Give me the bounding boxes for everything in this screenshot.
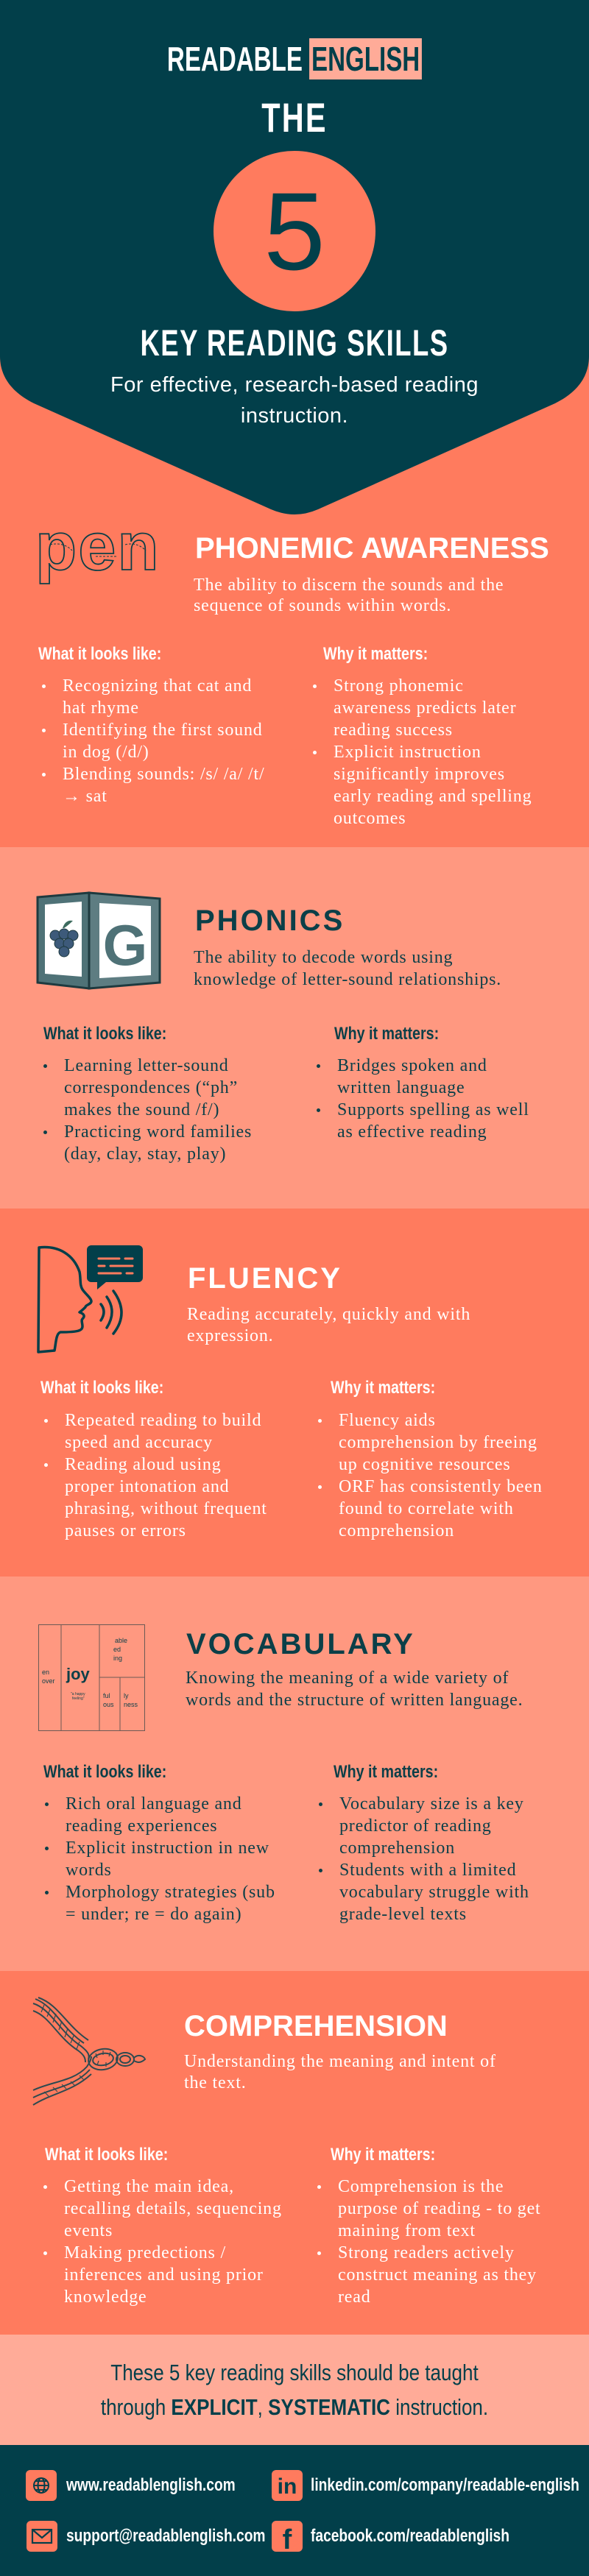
list: why it matters: Fluency aids: [339, 1411, 436, 1430]
subheading: what it looks like: What it looks like:: [43, 1024, 166, 1044]
subtitle: [110, 373, 479, 428]
list: what it looks like: [42, 676, 264, 806]
list: what it looks like: Repeated reading to build: [65, 1411, 261, 1430]
subheading: what it looks like: What it looks like:: [40, 1378, 163, 1398]
subheading: what it looks like: What it looks like:: [43, 1762, 166, 1782]
icon: morphology grid: [38, 1624, 145, 1731]
list: why it matters: significantly improves: [334, 765, 505, 784]
list: what it looks like: = under; re = do again): [66, 1905, 241, 1924]
list: what it looks like: recalling details, sequencing: [64, 2199, 282, 2218]
icon: morphology grid: feeling": [72, 1696, 85, 1701]
icon: morphology grid: joy: [66, 1665, 91, 1683]
panel: fluency: [0, 1209, 589, 1577]
list: what it looks like: Practicing word families: [64, 1122, 252, 1142]
icon: email: [27, 2521, 57, 2552]
heading: COMPREHENSION: [184, 2010, 448, 2042]
list: what it looks like: phrasing, without frequent: [65, 1499, 267, 1518]
list: why it matters: predictor of reading: [339, 1816, 492, 1836]
list: why it matters: vocabulary struggle with: [339, 1883, 529, 1902]
description: the text.: [184, 2073, 247, 2092]
list: why it matters: Strong phonemic: [334, 676, 464, 696]
list: what it looks like: Recognizing that cat and: [63, 676, 252, 696]
list: why it matters: read: [338, 2287, 371, 2307]
list: what it looks like: pauses or errors: [65, 1521, 186, 1540]
list: what it looks like: inferences and using prior: [64, 2265, 264, 2285]
icon: morphology grid: ing: [113, 1655, 122, 1662]
description: The ability to decode words using: [194, 948, 453, 967]
callout: explicit systematic instruction: through EXPLICIT, SYSTEMATIC instruction.: [101, 2394, 488, 2420]
list: why it matters: Vocabulary size is a key: [339, 1794, 524, 1814]
description: words and the structure of written language.: [186, 1691, 523, 1710]
icon: morphology grid: "a happy: [71, 1692, 85, 1696]
footer: contact links: [0, 2445, 589, 2576]
big number circle: [214, 151, 375, 311]
list: what it looks like: Getting the main idea,: [64, 2177, 234, 2196]
list: why it matters: purpose of reading - to get: [338, 2199, 541, 2218]
description: knowledge of letter-sound relationships.: [194, 970, 501, 989]
subheading: why it matters: Why it matters:: [331, 2145, 435, 2165]
icon: braided rope: [32, 1997, 146, 2106]
list: why it matters: Explicit instruction: [334, 743, 482, 762]
list: what it looks like: → sat: [63, 787, 107, 806]
description: sequence of sounds within words.: [194, 596, 451, 615]
list: what it looks like: events: [64, 2221, 113, 2240]
list: why it matters: written language: [337, 1078, 465, 1097]
list: why it matters: awareness predicts later: [334, 698, 516, 718]
description: Understanding the meaning and intent of: [184, 2052, 496, 2071]
list: why it matters: [313, 676, 532, 828]
list: why it matters: Strong readers actively: [338, 2243, 515, 2262]
heading: PHONICS: [195, 905, 345, 937]
list: why it matters: comprehension: [339, 1521, 454, 1540]
list: why it matters: Comprehension is the: [338, 2177, 504, 2196]
icon: speaking head: [37, 1245, 143, 1354]
icon: morphology grid: en: [42, 1669, 49, 1676]
list: why it matters: comprehension by freeing: [339, 1433, 537, 1452]
subheading: why it matters: Why it matters:: [331, 1378, 435, 1398]
list: what it looks like: proper intonation and: [65, 1477, 229, 1496]
list: what it looks like: reading experiences: [66, 1816, 217, 1836]
list: what it looks like: (day, clay, stay, play): [64, 1144, 226, 1164]
icon: morphology grid: ed: [113, 1646, 121, 1653]
heading: PHONEMIC AWARENESS: [195, 532, 549, 565]
list: what it looks like: Identifying the first sound: [63, 721, 263, 740]
list: what it looks like: [45, 1794, 275, 1924]
list: what it looks like: makes the sound /f/): [64, 1100, 219, 1119]
list: why it matters: Bridges spoken and: [337, 1056, 487, 1075]
list: why it matters: up cognitive resources: [339, 1455, 511, 1474]
list: why it matters: early reading and spelling: [334, 787, 532, 806]
list: why it matters: as effective reading: [337, 1122, 487, 1142]
icon: facebook: f: [283, 2524, 292, 2555]
list: what it looks like: Rich oral language and: [66, 1794, 242, 1814]
list: why it matters: [317, 2177, 541, 2307]
description: The ability to discern the sounds and the: [194, 576, 504, 595]
callout: explicit systematic instruction: [0, 2335, 589, 2445]
icon: morphology grid: able: [115, 1637, 127, 1644]
list: what it looks like: [43, 2177, 282, 2307]
icon: letter block: [37, 891, 161, 990]
description: Reading accurately, quickly and with: [187, 1305, 470, 1324]
icon: morphology grid: ly: [124, 1692, 129, 1699]
list: why it matters: grade-level texts: [339, 1905, 467, 1924]
icon: morphology grid: ous: [103, 1701, 114, 1708]
list: why it matters: maining from text: [338, 2221, 476, 2240]
list: what it looks like: Morphology strategies (sub: [66, 1883, 275, 1902]
list: why it matters: [319, 1794, 529, 1924]
icon: linkedin: in: [278, 2474, 297, 2499]
big number circle: 5: [264, 169, 325, 293]
subheading: why it matters: Why it matters:: [334, 1024, 439, 1044]
subheading: what it looks like: What it looks like:: [45, 2145, 168, 2165]
list: why it matters: construct meaning as they: [338, 2265, 537, 2285]
subheading: why it matters: Why it matters:: [334, 1762, 438, 1782]
list: what it looks like: Making predections /: [64, 2243, 226, 2262]
list: why it matters: Supports spelling as well: [337, 1100, 529, 1119]
list: why it matters: found to correlate with: [339, 1499, 514, 1518]
subtitle: For effective, research-based reading: [110, 373, 479, 397]
icon: globe: [26, 2470, 57, 2501]
description: Knowing the meaning of a wide variety of: [186, 1669, 509, 1688]
list: what it looks like: words: [66, 1861, 112, 1880]
icon: facebook: [272, 2521, 303, 2552]
panel: vocabulary: [0, 1577, 589, 1971]
logo: READABLE ENGLISH: [167, 40, 420, 78]
description: [184, 2052, 496, 2092]
list: why it matters: reading success: [334, 721, 453, 740]
list: what it looks like: hat rhyme: [63, 698, 139, 718]
list: why it matters: [317, 1056, 529, 1142]
list: what it looks like: Explicit instruction in new: [66, 1839, 269, 1858]
list: what it looks like: Learning letter-sound: [64, 1056, 229, 1075]
icon: morphology grid: ful: [103, 1692, 110, 1699]
heading: FLUENCY: [188, 1262, 342, 1295]
header: dark shield: [0, 0, 589, 514]
description: [194, 576, 504, 615]
subheading: why it matters: Why it matters:: [323, 644, 428, 664]
list: what it looks like: Blending sounds: /s/ /a/ /t/: [63, 765, 264, 784]
facebook link: facebook.com/readablenglish: [311, 2526, 509, 2546]
icon: morphology grid: ness: [124, 1701, 138, 1708]
list: why it matters: outcomes: [334, 809, 406, 828]
icon: linkedin: [272, 2470, 303, 2501]
callout: explicit systematic instruction: These 5 key reading skills should be taught: [110, 2360, 479, 2385]
description: [194, 948, 501, 989]
list: why it matters: Students with a limited: [339, 1861, 516, 1880]
subheading: what it looks like: What it looks like:: [38, 644, 161, 664]
list: why it matters: ORF has consistently been: [339, 1477, 543, 1496]
panel: phonemic awareness: [0, 515, 589, 847]
linkedin link: linkedin.com/company/readable-english: [311, 2475, 579, 2495]
title: key reading skills: KEY READING SKILLS: [140, 322, 449, 364]
list: why it matters: [318, 1411, 543, 1540]
list: what it looks like: correspondences (“ph”: [64, 1078, 238, 1097]
list: what it looks like: [44, 1411, 267, 1540]
panel: phonics: [0, 847, 589, 1209]
list: what it looks like: Reading aloud using: [65, 1455, 222, 1474]
icon: letter block: G: [103, 913, 147, 977]
list: why it matters: comprehension: [339, 1839, 455, 1858]
list: what it looks like: in dog (/d/): [63, 743, 149, 762]
description: [186, 1669, 523, 1710]
description: expression.: [187, 1326, 273, 1345]
description: [187, 1305, 470, 1345]
title: THE: THE: [261, 94, 328, 141]
list: what it looks like: speed and accuracy: [65, 1433, 213, 1452]
list: what it looks like: knowledge: [64, 2287, 147, 2307]
panel: comprehension: [0, 1971, 589, 2335]
icon: morphology grid: over: [42, 1677, 55, 1685]
website link: www.readablenglish.com: [66, 2475, 236, 2495]
heading: VOCABULARY: [186, 1628, 415, 1660]
subtitle: instruction.: [241, 404, 348, 428]
email link: support@readablenglish.com: [66, 2526, 265, 2546]
list: what it looks like: [43, 1056, 252, 1164]
